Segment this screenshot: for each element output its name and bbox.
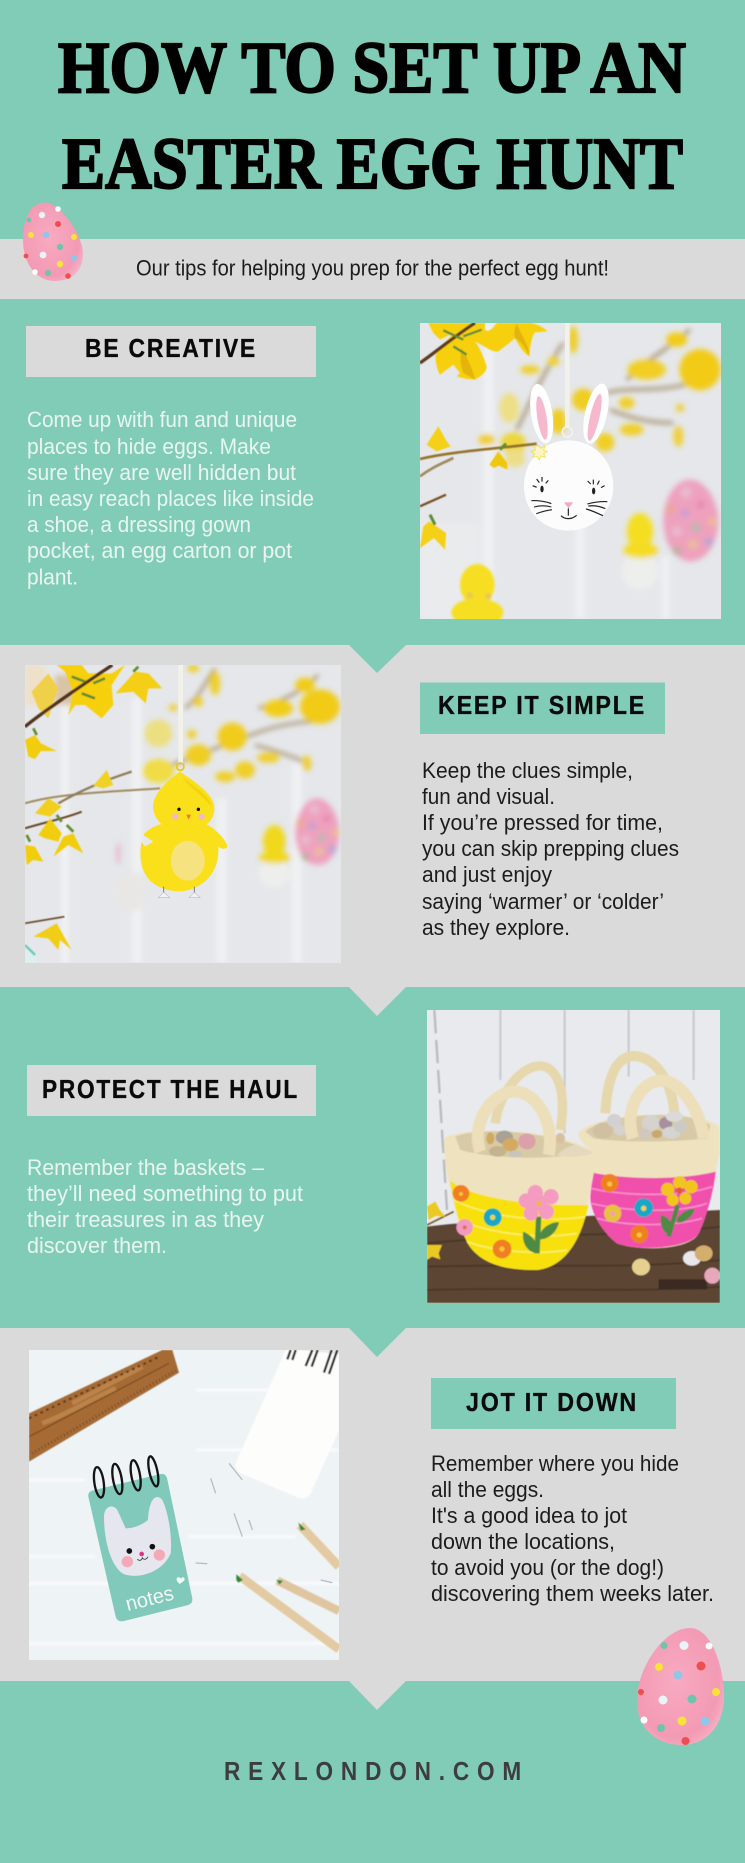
text: keep it simple body: saying ‘warmer’ or ‘colder’: [422, 889, 664, 914]
text: be creative body: places to hide eggs. Make: [27, 434, 271, 459]
title: EASTER EGG HUNT: [62, 123, 683, 204]
text: jot it down body: all the eggs.: [431, 1477, 544, 1502]
footer website: REXLONDON.COM: [224, 1756, 529, 1786]
heading: jot it down: [431, 1378, 676, 1429]
text: protect the haul body: they’ll need something to put: [27, 1181, 303, 1206]
grey section background: [0, 645, 745, 987]
icon: pink egg top: [23, 202, 83, 281]
text: protect the haul body: their treasures in as they: [27, 1207, 264, 1232]
bunny ornament: [524, 323, 614, 531]
arrow: grey pointer to footer: [349, 1681, 406, 1710]
photo: straw baskets with eggs: [427, 1010, 720, 1303]
subtitle band: [0, 239, 745, 299]
heading: keep it simple: KEEP IT SIMPLE: [438, 690, 646, 720]
text: jot it down body: discovering them weeks later.: [431, 1581, 714, 1606]
pink basket: [578, 1056, 720, 1248]
yellow basket: [444, 1066, 596, 1270]
text: jot it down body: [431, 1451, 714, 1606]
heading: be creative: BE CREATIVE: [85, 333, 257, 363]
text: keep it simple body: fun and visual.: [422, 784, 555, 809]
text: be creative body: plant.: [27, 564, 78, 590]
text: keep it simple body: [422, 758, 679, 940]
text: jot it down body: down the locations,: [431, 1529, 615, 1554]
text: protect the haul body: [27, 1155, 303, 1258]
text: be creative body: pocket, an egg carton or pot: [27, 538, 292, 563]
ruler: [29, 1350, 179, 1462]
text: keep it simple body: as they explore.: [422, 915, 570, 940]
panel: protect the haul: [27, 987, 720, 1303]
text: keep it simple body: you can skip prepping clues: [422, 836, 679, 861]
arrow: teal pointer: [349, 1328, 406, 1357]
pencils: [240, 1576, 339, 1649]
arrow: grey pointer: [349, 987, 406, 1016]
text: keep it simple body: Keep the clues simple,: [422, 758, 633, 783]
panel: keep it simple: [0, 645, 745, 987]
icon: pink egg bottom: [637, 1628, 724, 1745]
text: be creative body: in easy reach places like inside: [27, 486, 314, 511]
heading: be creative: [26, 326, 316, 377]
arrow: teal pointer: [349, 645, 406, 673]
bunny notepad: [88, 1456, 192, 1621]
chick ornament: [140, 665, 227, 898]
heading: protect the haul: PROTECT THE HAUL: [42, 1074, 299, 1104]
text: be creative body: a shoe, a dressing gown: [27, 512, 251, 537]
blank notepad: [235, 1350, 339, 1499]
text: be creative body: Come up with fun and unique: [27, 407, 297, 432]
text: jot it down body: It's a good idea to jot: [431, 1503, 627, 1528]
heading: keep it simple: [420, 682, 665, 734]
photo: bunny egg decoration on forsythia: [420, 323, 721, 619]
bunny notepad: notes: [123, 1582, 176, 1616]
text: protect the haul body: Remember the baskets –: [27, 1155, 265, 1180]
photo: bunny notepad, ruler and pencils: [29, 1350, 339, 1660]
subtitle band: Our tips for helping you prep for the perfect egg hunt!: [136, 256, 609, 280]
text: be creative body: [27, 407, 314, 590]
panel: be creative: [26, 323, 721, 626]
text: be creative body: sure they are well hidden but: [27, 460, 296, 485]
title: [58, 27, 686, 204]
title: HOW TO SET UP AN: [58, 27, 686, 108]
text: keep it simple body: If you’re pressed for time,: [422, 810, 663, 835]
grey section background: [0, 1328, 745, 1681]
photo: chick decoration on forsythia: [25, 665, 341, 963]
text: jot it down body: Remember where you hide: [431, 1451, 679, 1476]
text: protect the haul body: discover them.: [27, 1233, 167, 1258]
panel: jot it down: [0, 1328, 745, 1681]
text: jot it down body: to avoid you (or the dog!): [431, 1555, 664, 1580]
text: keep it simple body: and just enjoy: [422, 862, 552, 887]
heading: jot it down: JOT IT DOWN: [466, 1387, 638, 1417]
heading: protect the haul: [27, 1065, 316, 1116]
